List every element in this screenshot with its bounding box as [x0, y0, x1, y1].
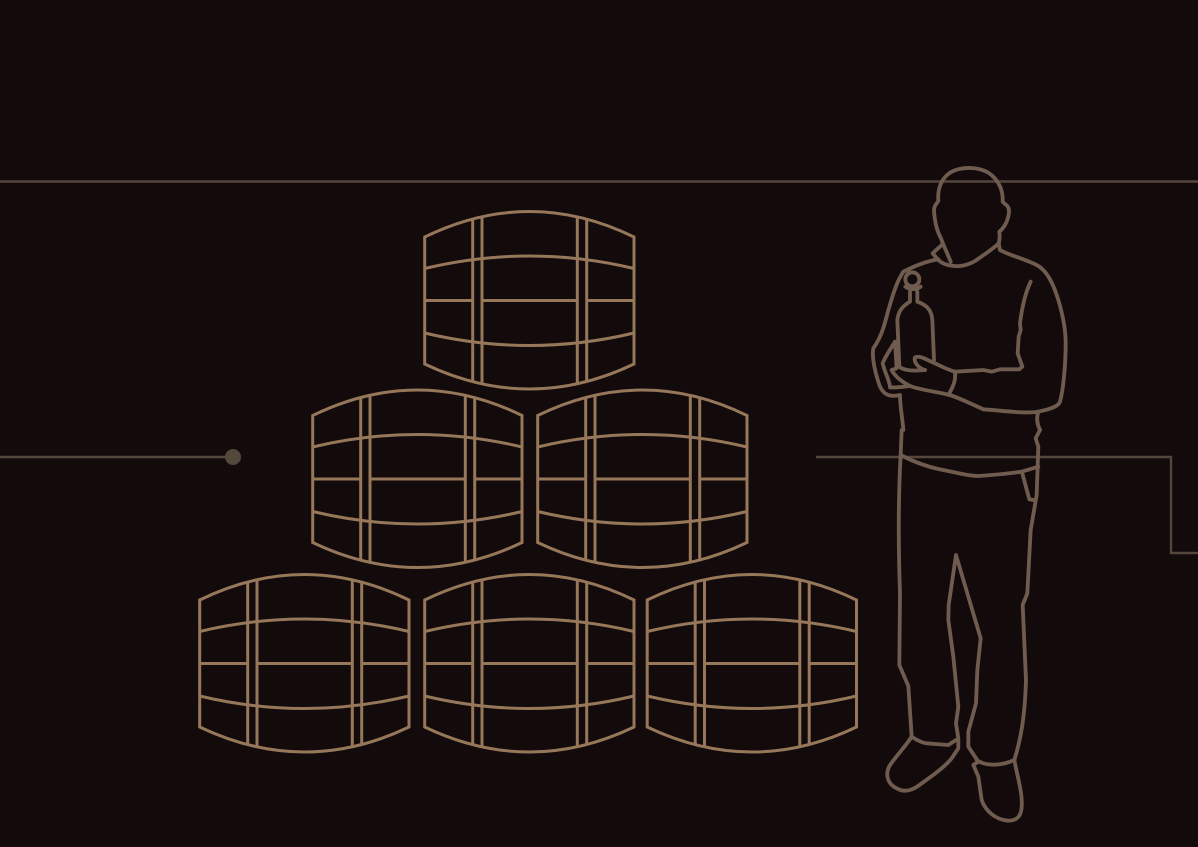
barrel: middle row left: [313, 390, 522, 568]
barrel: middle row right: [538, 390, 747, 568]
left connector line with dot: [0, 449, 241, 465]
top horizontal rule: [0, 180, 1198, 183]
barrel: top row: [425, 212, 634, 389]
barrel: bottom row centre: [425, 574, 634, 752]
barrel: bottom row left: [200, 574, 409, 752]
lower body: [887, 430, 1040, 821]
upper body: [873, 168, 1066, 430]
right stepped connector line: [816, 457, 1198, 553]
barrel: bottom row right: [647, 574, 856, 752]
barrel stack: [200, 212, 856, 752]
person holding bottle: [873, 168, 1066, 821]
